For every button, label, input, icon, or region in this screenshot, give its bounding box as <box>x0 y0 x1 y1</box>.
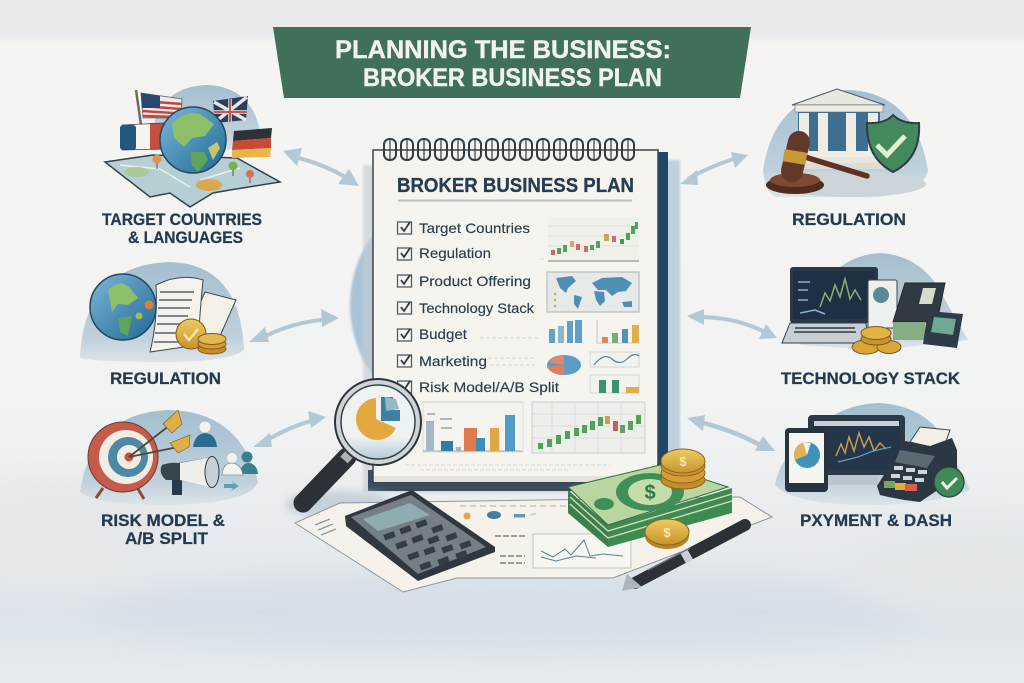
title banner <box>273 27 751 98</box>
coin stack <box>661 449 705 489</box>
money stack: $ <box>644 482 656 504</box>
arrow: technology stack to plan <box>687 309 777 339</box>
checklist <box>398 220 559 395</box>
coins <box>852 326 901 354</box>
money stack <box>568 465 732 547</box>
darts <box>129 410 190 457</box>
laptop <box>782 267 878 343</box>
target <box>88 422 158 499</box>
checklist: Risk Model/A/B Split <box>419 379 559 395</box>
icon: technology stack <box>782 253 968 354</box>
payment terminal <box>923 311 963 348</box>
magnifying glass <box>303 379 421 503</box>
notebook heading: BROKER BUSINESS PLAN <box>397 174 634 197</box>
icon: regulation documents and globe <box>80 262 244 362</box>
label: payment and dash: PXYMENT & DASH <box>800 512 952 530</box>
label: risk model: RISK MODEL & <box>101 512 225 530</box>
globe <box>90 274 156 340</box>
label: target countries and languages: & LANGUAGES <box>128 229 243 247</box>
arrow: risk model to plan <box>253 411 326 447</box>
financial papers <box>295 497 772 592</box>
notebook <box>350 139 680 493</box>
gold seal <box>176 319 206 349</box>
title line 1: PLANNING THE BUSINESS: <box>335 36 671 64</box>
icon: risk model target and megaphone <box>80 410 258 505</box>
arrow: regulation right to plan <box>680 152 748 185</box>
small multicolor bars <box>597 320 639 343</box>
tablet <box>868 280 897 328</box>
checklist: Product Offering <box>419 273 531 289</box>
icon: regulation courthouse gavel and shield <box>763 89 928 197</box>
label: regulation left: REGULATION <box>110 370 221 388</box>
small line chart <box>590 352 639 367</box>
tablet <box>785 428 828 492</box>
flag: USA <box>136 90 182 125</box>
monitor <box>808 415 905 485</box>
document back <box>186 292 236 345</box>
notebook page <box>373 150 658 482</box>
map pins <box>152 154 254 183</box>
label: target countries and languages: TARGET COUNTRIES <box>102 211 262 229</box>
icon: target countries and languages <box>105 85 280 207</box>
single coin: $ <box>663 525 671 540</box>
small green bars <box>590 375 639 393</box>
people icons <box>193 422 258 491</box>
small blue bars <box>549 320 582 343</box>
notebook backdrop <box>350 152 680 493</box>
coins <box>198 334 226 354</box>
coin stack: $ <box>679 454 687 469</box>
title line 2: BROKER BUSINESS PLAN <box>363 64 662 92</box>
desk shadow <box>285 491 395 519</box>
pie chart small <box>547 355 581 375</box>
label: risk model <box>101 512 225 548</box>
icon: payment and dashboard <box>775 403 970 505</box>
document front <box>150 277 203 352</box>
label: risk model: A/B SPLIT <box>125 530 208 548</box>
map <box>105 155 280 207</box>
flag: UK <box>213 96 248 123</box>
label: target countries and languages <box>102 211 262 247</box>
shield <box>867 115 919 172</box>
candlestick chart small <box>548 217 639 261</box>
calculator <box>345 490 495 581</box>
checklist: Budget <box>419 326 467 342</box>
candlestick chart large <box>532 402 645 453</box>
check badge <box>934 467 964 497</box>
papers and desk items <box>285 379 772 592</box>
checklist: Technology Stack <box>419 300 535 316</box>
flag: Germany <box>232 128 272 158</box>
arrow: regulation left to plan <box>249 309 339 342</box>
label: technology stack: TECHNOLOGY STACK <box>781 370 960 388</box>
world map <box>547 272 639 312</box>
single coin <box>645 519 689 549</box>
bar chart large <box>423 402 523 452</box>
payment terminal <box>877 427 957 502</box>
flag: France <box>120 123 164 150</box>
checklist: Marketing <box>419 353 487 369</box>
checklist: Target Countries <box>419 220 530 236</box>
gavel <box>766 142 867 194</box>
phone device <box>893 283 945 340</box>
label: regulation right: REGULATION <box>792 211 906 229</box>
arrow: payment to plan <box>687 415 775 451</box>
arrow: target countries to plan <box>283 148 359 186</box>
spiral binding <box>384 139 634 160</box>
megaphone <box>161 456 219 495</box>
faint text lines <box>405 259 610 470</box>
globe <box>160 107 226 173</box>
pen <box>622 525 745 591</box>
courthouse <box>786 89 904 169</box>
checklist: Regulation <box>419 245 491 261</box>
